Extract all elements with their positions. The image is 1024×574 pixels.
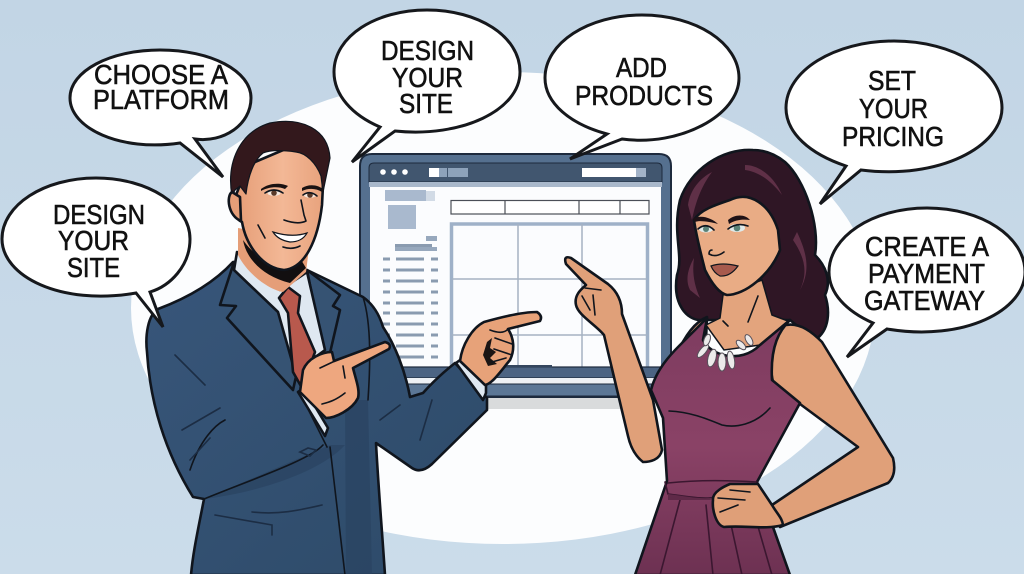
dress [635, 318, 800, 574]
window dots [380, 169, 408, 175]
suit shading [204, 400, 372, 574]
speech bubble: choose a platform [70, 50, 251, 177]
speech bubble: set your pricing: SET [868, 65, 916, 96]
speech bubble: create a payment gateway: PAYMENT [868, 258, 985, 289]
speech bubble: design your site (left): DESIGN [53, 199, 145, 230]
speech bubble: add products: ADD [616, 52, 667, 83]
top table [451, 200, 649, 214]
speech bubble: choose a platform: CHOOSE A [94, 59, 228, 90]
woman in plum dress [565, 150, 894, 574]
speech bubble: design your site (left): YOUR [58, 225, 129, 256]
speech bubble: design your site (top): YOUR [392, 62, 463, 93]
screen page [370, 187, 661, 367]
face [233, 145, 324, 270]
eyebrows [693, 216, 750, 224]
left shoulder skin [676, 317, 707, 356]
speech bubble: design your site (left) [2, 178, 190, 327]
screen title bar [369, 163, 662, 182]
speech bubble: set your pricing [786, 41, 1002, 204]
shirt and collar [234, 252, 325, 372]
speech bubble: design your site (top) [334, 10, 520, 162]
necklace [696, 333, 755, 371]
speech bubble: add products: PRODUCTS [575, 80, 713, 111]
speech bubble: create a payment gateway [829, 208, 1024, 357]
browser tabs [429, 168, 468, 177]
left cuff [298, 388, 328, 436]
speech bubble: create a payment gateway: GATEWAY [864, 285, 985, 316]
speech bubble: set your pricing: PRICING [842, 121, 944, 152]
left lapel [220, 262, 297, 390]
speech bubble: design your site (top): DESIGN [381, 35, 474, 66]
hand on hip [713, 484, 783, 527]
sleeve seam and folds [190, 393, 327, 470]
nose [709, 250, 724, 256]
content grid [452, 224, 648, 367]
eyes [265, 190, 317, 198]
face [694, 197, 780, 295]
speech bubble: design your site (left): SITE [67, 252, 120, 283]
suit [146, 262, 487, 574]
lips [711, 264, 738, 276]
eyes [698, 224, 748, 232]
speech bubble: set your pricing: YOUR [859, 93, 928, 124]
pointing hand at chest [300, 342, 390, 418]
dress folds and skirt pleats [669, 408, 770, 426]
monitor showing website layout [360, 154, 671, 409]
sidebar [383, 190, 438, 358]
ear [229, 192, 241, 221]
speech bubble: choose a platform: PLATFORM [93, 84, 229, 115]
white background ellipse [131, 72, 875, 544]
neck and chest [706, 280, 788, 350]
hair [231, 121, 330, 196]
right lapel [307, 270, 340, 370]
monitor shadow [378, 396, 653, 409]
monitor lower frame [361, 367, 670, 378]
man in navy suit [146, 121, 541, 574]
dress waist shadow [668, 494, 716, 500]
eyebrows [261, 184, 324, 192]
monitor frame [360, 154, 671, 397]
right upper arm and shoulder [771, 325, 894, 527]
raised arm [565, 257, 662, 462]
pointing hand toward screen [460, 312, 541, 385]
nose [284, 200, 306, 223]
hair back [676, 150, 828, 340]
speech bubble: create a payment gateway: CREATE A [865, 231, 989, 262]
smile [258, 225, 307, 248]
tie [279, 287, 315, 388]
hair highlights [687, 165, 806, 298]
speech bubble: design your site (top): SITE [399, 88, 453, 119]
address bar [582, 168, 646, 177]
speech bubble: add products [545, 15, 739, 159]
right cuff [456, 360, 486, 400]
neck [238, 228, 310, 292]
